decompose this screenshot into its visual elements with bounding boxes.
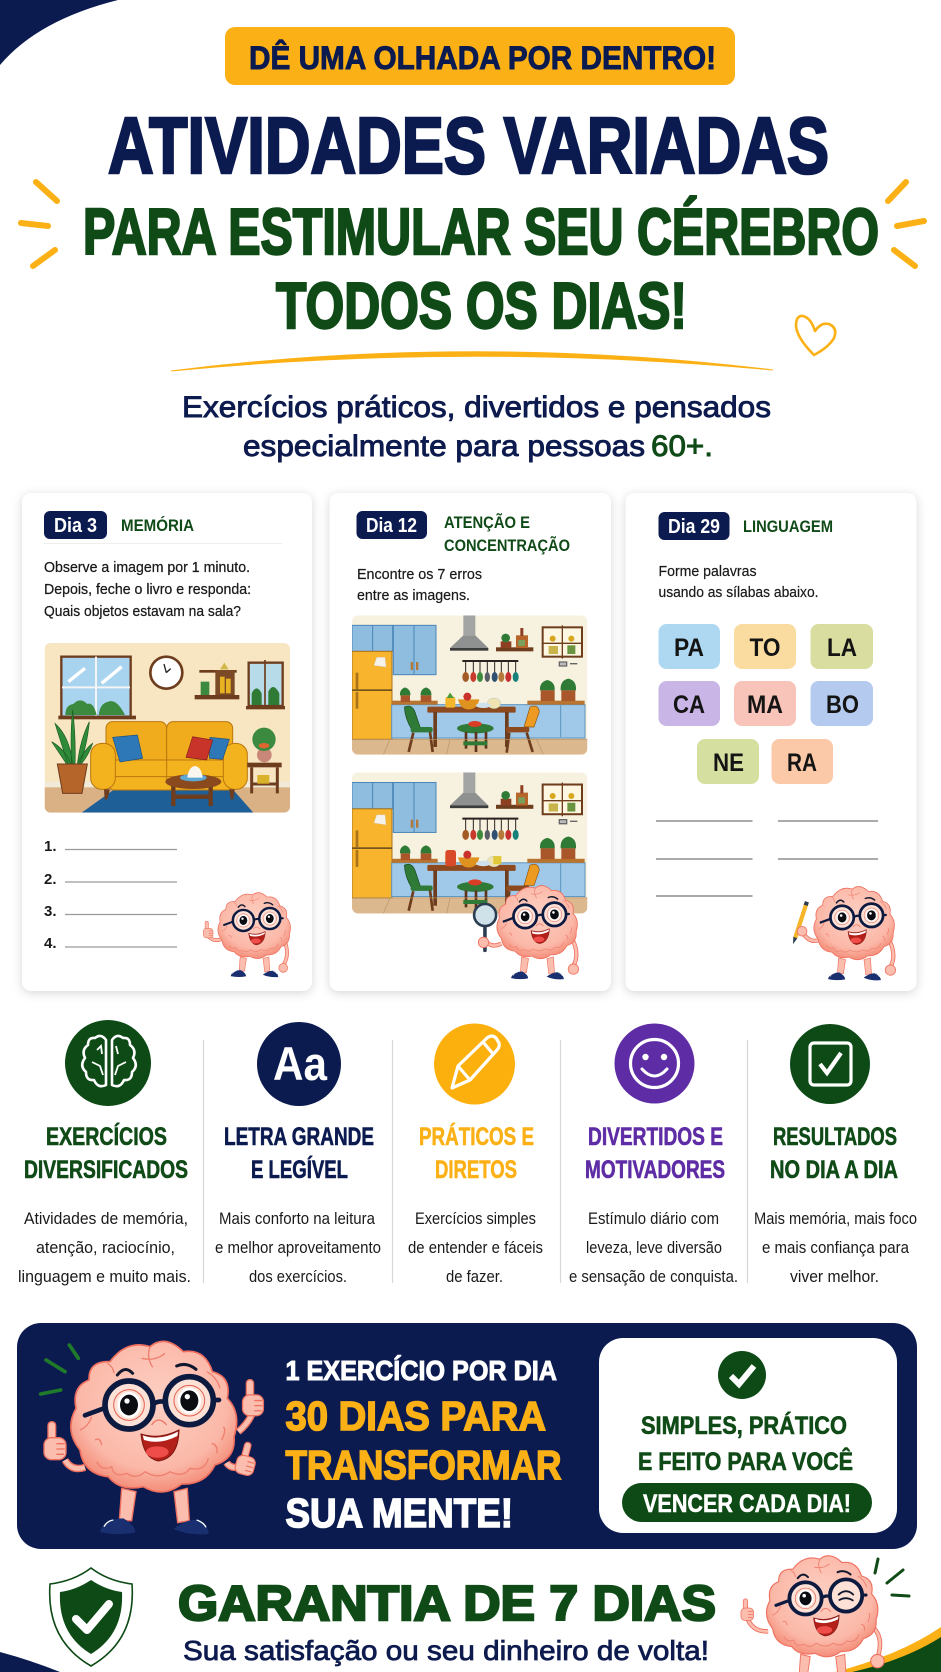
description: Exercícios simples <box>415 1210 536 1228</box>
slogan <box>286 1355 562 1536</box>
icon: guarantee shield <box>50 1568 132 1666</box>
icon: sun rays right <box>888 182 924 266</box>
answer lines <box>44 838 177 952</box>
feature: divertidos e motivadores <box>569 1024 738 1286</box>
panel: card Dia 12 atenção <box>330 493 611 991</box>
heading: EXERCÍCIOS <box>46 1122 167 1151</box>
description: linguagem e muito mais. <box>18 1268 191 1286</box>
description <box>754 1210 917 1286</box>
icon: sun rays left <box>21 182 57 266</box>
description: Estímulo diário com <box>588 1210 719 1228</box>
subtitle: especialmente para pessoas <box>243 430 645 463</box>
header badge <box>225 27 735 85</box>
callout box <box>599 1338 897 1533</box>
icon: heart <box>796 316 835 355</box>
subtitle <box>182 391 771 463</box>
callout text <box>638 1411 853 1476</box>
syllable tiles: BO <box>826 691 859 719</box>
syllable tiles: PA <box>674 634 704 662</box>
syllable tiles: TO <box>750 634 780 662</box>
illustration: kitchen 1 <box>352 615 587 755</box>
instructions: Depois, feche o livro e responda: <box>44 581 251 598</box>
mascot: brain thumbs up <box>203 893 291 977</box>
heading: E LEGÍVEL <box>251 1155 348 1184</box>
instructions: entre as imagens. <box>357 587 470 604</box>
instructions <box>658 563 818 601</box>
syllable tiles: NE <box>713 749 744 777</box>
feature: práticos e diretos <box>408 1024 543 1286</box>
slogan: 30 DIAS PARA <box>286 1393 546 1439</box>
syllable tiles <box>658 624 873 784</box>
icon: smiley <box>614 1024 694 1104</box>
description: de fazer. <box>446 1268 503 1286</box>
heading: NO DIA A DIA <box>770 1156 898 1184</box>
day badge: Dia 29 <box>668 516 720 538</box>
mascot: brain with magnifier <box>474 886 579 979</box>
day badge <box>356 511 427 539</box>
heading: DIVERSIFICADOS <box>24 1156 188 1184</box>
heading <box>224 1123 374 1184</box>
callout text: SIMPLES, PRÁTICO <box>641 1411 847 1440</box>
feature: exercícios diversificados <box>18 1020 191 1286</box>
illustration: kitchen 2 <box>352 772 587 913</box>
category label <box>444 512 570 555</box>
category label: LINGUAGEM <box>743 517 833 536</box>
syllable tiles: MA <box>747 691 783 719</box>
day badge: Dia 12 <box>366 515 417 537</box>
feature: letra grande <box>215 1022 381 1286</box>
slogan: SUA MENTE! <box>286 1490 513 1536</box>
category label: MEMÓRIA <box>121 516 194 535</box>
heading <box>24 1122 188 1184</box>
syllable tiles: CA <box>673 691 705 719</box>
description <box>215 1210 381 1286</box>
heading: RESULTADOS <box>773 1123 897 1151</box>
icon: Aa: Aa <box>273 1037 328 1090</box>
subtitle: Exercícios práticos, divertidos e pensados <box>182 391 771 424</box>
description: e melhor aproveitamento <box>215 1239 381 1257</box>
pill button: VENCER CADA DIA! <box>643 1490 851 1518</box>
description <box>18 1210 191 1286</box>
description <box>408 1210 543 1286</box>
instructions: Observe a imagem por 1 minuto. <box>44 559 250 576</box>
description: Atividades de memória, <box>24 1210 188 1228</box>
top corner swoosh <box>0 0 118 65</box>
answer lines: 3. <box>44 903 57 920</box>
slogan: 1 EXERCÍCIO POR DIA <box>286 1355 557 1386</box>
mascot: brain winking <box>741 1556 884 1672</box>
description: atenção, raciocínio, <box>36 1239 175 1257</box>
heading: MOTIVADORES <box>585 1156 725 1184</box>
header badge: DÊ UMA OLHADA POR DENTRO! <box>249 40 716 76</box>
syllable tiles: RA <box>787 749 817 777</box>
mascot: brain two thumbs <box>41 1341 263 1534</box>
syllable tiles: LA <box>827 634 857 662</box>
answer lines <box>656 821 878 896</box>
title <box>83 101 879 342</box>
icon: brain <box>65 1020 151 1106</box>
panel: banner 30 dias <box>17 1323 917 1549</box>
feature: resultados no dia a dia <box>754 1024 917 1286</box>
guarantee heading: GARANTIA DE 7 DIAS <box>178 1577 716 1631</box>
subtitle: 60+. <box>651 430 713 463</box>
instructions: Encontre os 7 erros <box>357 566 482 583</box>
instructions <box>357 566 482 604</box>
underline curve <box>171 352 773 371</box>
instructions: Quais objetos estavam na sala? <box>44 603 241 620</box>
instructions <box>44 559 251 620</box>
icon: wink sparkle rays <box>875 1559 909 1596</box>
bottom right swoosh <box>835 1627 941 1672</box>
category label: CONCENTRAÇÃO <box>444 535 570 555</box>
day badge <box>658 512 730 540</box>
bottom left swoosh <box>0 1652 60 1672</box>
guarantee subtitle: Sua satisfação ou seu dinheiro de volta! <box>183 1635 709 1666</box>
description: e sensação de conquista. <box>569 1268 738 1286</box>
heading: PRÁTICOS E <box>419 1122 534 1151</box>
icon: check <box>718 1351 766 1399</box>
callout text: E FEITO PARA VOCÊ <box>638 1446 853 1476</box>
mascot: brain with pencil <box>793 887 896 980</box>
heading: LETRA GRANDE <box>224 1123 374 1151</box>
instructions: usando as sílabas abaixo. <box>658 584 818 601</box>
slogan: TRANSFORMAR <box>286 1442 562 1488</box>
heading <box>419 1122 534 1184</box>
day badge: Dia 3 <box>54 515 97 537</box>
title: TODOS OS DIAS! <box>276 269 687 342</box>
description: de entender e fáceis <box>408 1239 543 1257</box>
answer lines: 4. <box>44 935 57 952</box>
heading <box>585 1123 725 1184</box>
description <box>569 1210 738 1286</box>
illustration: living room <box>45 643 290 813</box>
description: e mais confiança para <box>762 1239 910 1257</box>
panel: card Dia 3 memória <box>22 493 312 991</box>
heading: DIRETOS <box>435 1156 517 1184</box>
icon: checkbox <box>790 1024 870 1104</box>
answer lines: 1. <box>44 838 57 855</box>
heading: DIVERTIDOS E <box>588 1123 723 1151</box>
description: Mais conforto na leitura <box>219 1210 376 1228</box>
day badge <box>44 511 107 539</box>
description: leveza, leve diversão <box>586 1239 722 1257</box>
icon: Aa <box>257 1022 341 1106</box>
icon: pencil <box>434 1024 515 1104</box>
heading <box>770 1123 898 1184</box>
description: Mais memória, mais foco <box>754 1210 917 1228</box>
description: dos exercícios. <box>249 1268 347 1286</box>
panel: card Dia 29 linguagem <box>626 493 916 991</box>
instructions: Forme palavras <box>658 563 756 580</box>
description: viver melhor. <box>790 1268 879 1286</box>
answer lines: 2. <box>44 871 57 888</box>
pill button <box>622 1483 872 1522</box>
category label: ATENÇÃO E <box>444 512 530 532</box>
